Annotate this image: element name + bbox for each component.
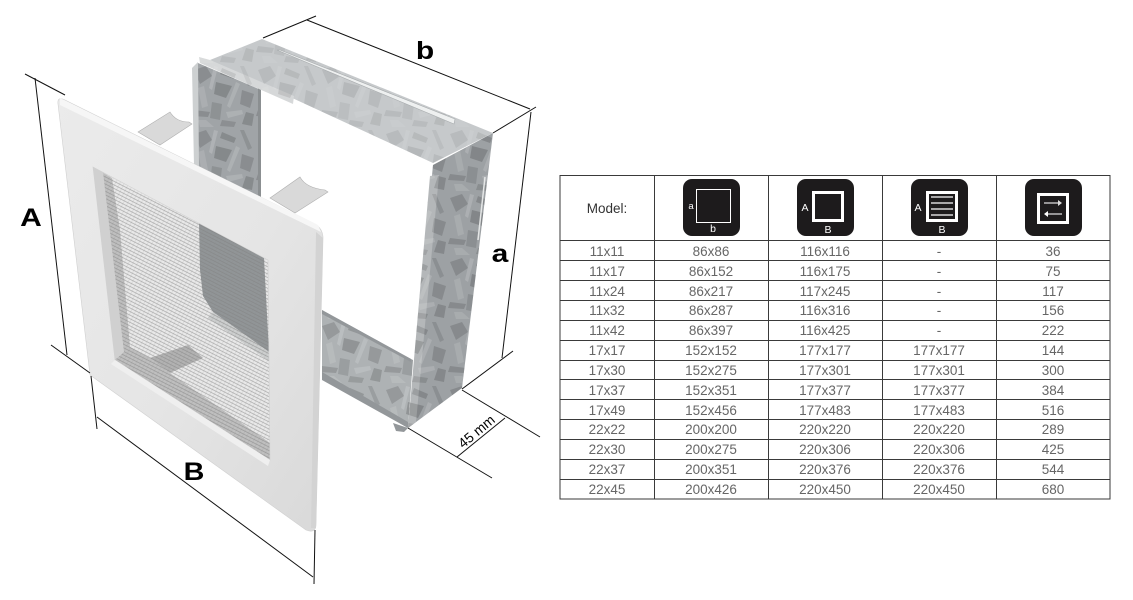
- row 11x11: 86x86: [693, 244, 729, 259]
- back frame bottom plate: [322, 310, 413, 432]
- dimension A: A: [20, 203, 42, 231]
- row 22x22: 220x220: [799, 422, 851, 437]
- row 11x11: [590, 244, 1061, 259]
- icon: opening size a x b: b: [710, 223, 716, 235]
- row 22x30: 425: [1042, 442, 1064, 457]
- row 11x32: 116x316: [800, 303, 850, 318]
- row 11x42: 86x397: [689, 323, 733, 338]
- row 17x30: 152x275: [685, 363, 737, 378]
- row 22x45: 22x45: [589, 482, 625, 497]
- row 22x22: 200x200: [685, 422, 737, 437]
- dimension B: B: [184, 458, 204, 486]
- row 17x37: 384: [1042, 383, 1065, 398]
- row 22x45: 220x450: [799, 482, 851, 497]
- row 11x11: 36: [1045, 244, 1061, 259]
- icon: outer size A x B: [797, 179, 854, 236]
- row 22x30: 200x275: [685, 442, 737, 457]
- row 11x24: 117x245: [800, 284, 850, 299]
- row 17x49: 152x456: [685, 403, 737, 418]
- row 17x37: 177x377: [913, 383, 965, 398]
- illustration: back mounting frame: [192, 39, 493, 432]
- row 11x17: 11x17: [589, 264, 625, 279]
- row 17x37: 177x377: [799, 383, 851, 398]
- dimension A: [20, 74, 90, 373]
- row 11x42: 222: [1042, 323, 1064, 338]
- row 17x17: 177x177: [913, 343, 965, 358]
- icon: outer size A x B: B: [824, 224, 832, 236]
- row 17x17: 17x17: [589, 343, 625, 358]
- row 11x17: 116x175: [800, 264, 850, 279]
- size table: [560, 175, 1110, 499]
- row 11x32: -: [937, 303, 941, 318]
- row 11x17: 75: [1045, 264, 1061, 279]
- row 22x30: [589, 442, 1064, 457]
- row 22x22: 289: [1042, 422, 1064, 437]
- row 17x30: [589, 363, 1064, 378]
- dimension B: [91, 376, 315, 584]
- illustration: white front grille: [58, 98, 323, 531]
- inner shadow bands: [93, 167, 270, 460]
- row 11x24: 11x24: [589, 284, 625, 299]
- row 11x17: -: [937, 264, 941, 279]
- row 11x42: -: [937, 323, 941, 338]
- row 17x17: 177x177: [799, 343, 851, 358]
- row 17x30: 17x30: [589, 363, 625, 378]
- row 17x30: 177x301: [799, 363, 851, 378]
- dimension 45 mm: [408, 390, 540, 478]
- row 17x17: 144: [1042, 343, 1065, 358]
- icon: opening size a x b: [683, 179, 740, 236]
- row 22x37: 220x376: [913, 462, 965, 477]
- grille opening with mesh: [93, 167, 270, 460]
- row 11x11: 11x11: [590, 244, 624, 259]
- back frame right wall: [408, 133, 493, 428]
- row 22x37: 544: [1042, 462, 1065, 477]
- row 11x17: 86x152: [689, 264, 733, 279]
- row 22x22: 22x22: [589, 422, 625, 437]
- row 22x45: 220x450: [913, 482, 965, 497]
- illustration: mounting clips: [138, 112, 328, 213]
- icon: grille size A x B: [911, 179, 968, 236]
- row 11x11: -: [937, 244, 941, 259]
- row 22x30: 220x306: [799, 442, 851, 457]
- table grid: [560, 175, 1110, 499]
- row 17x49: 177x483: [913, 403, 965, 418]
- back frame seen through mesh: [199, 222, 269, 352]
- right clip: [270, 177, 328, 213]
- dimension a: a: [492, 239, 509, 267]
- icon: grille size A x B: B: [938, 224, 946, 236]
- row 11x24: 86x217: [689, 284, 733, 299]
- dimension 45 mm: 45 mm: [455, 411, 498, 451]
- row 11x42: [589, 323, 1064, 338]
- back frame left wall: [192, 62, 261, 200]
- dimension b: b: [416, 36, 434, 64]
- row 11x32: 11x32: [589, 303, 625, 318]
- row 22x45: 680: [1042, 482, 1064, 497]
- icon: grille size A x B: A: [914, 202, 922, 214]
- row 11x17: [589, 264, 1061, 279]
- header: model: Model:: [587, 201, 627, 216]
- row 22x37: [589, 462, 1065, 477]
- row 22x37: 200x351: [685, 462, 737, 477]
- dimension b: [263, 16, 536, 133]
- row 17x30: 300: [1042, 363, 1064, 378]
- icon: airflow area: [1025, 179, 1082, 236]
- row 11x42: 11x42: [589, 323, 625, 338]
- grille right edge: [311, 232, 323, 528]
- row 17x49: 177x483: [799, 403, 851, 418]
- row 17x30: 177x301: [913, 363, 965, 378]
- back frame top face: [199, 39, 493, 163]
- dimension a: [462, 112, 531, 389]
- row 11x32: 156: [1042, 303, 1064, 318]
- row 17x17: 152x152: [685, 343, 737, 358]
- row 17x49: [589, 403, 1064, 418]
- row 22x37: 220x376: [799, 462, 851, 477]
- grille lower inner bevel: [111, 360, 270, 466]
- row 22x30: 220x306: [913, 442, 965, 457]
- row 17x49: 516: [1042, 403, 1064, 418]
- row 17x37: 17x37: [589, 383, 625, 398]
- row 17x37: [589, 383, 1065, 398]
- row 11x32: [589, 303, 1064, 318]
- left clip: [138, 112, 192, 145]
- row 22x22: 220x220: [913, 422, 965, 437]
- row 17x49: 17x49: [589, 403, 625, 418]
- row 22x30: 22x30: [589, 442, 625, 457]
- grille face: [58, 99, 323, 531]
- grille top bevel highlight: [60, 98, 321, 232]
- icon: outer size A x B: A: [801, 202, 809, 214]
- icon: opening size a x b: a: [688, 201, 694, 212]
- row 22x45: [589, 482, 1064, 497]
- row 11x32: 86x287: [689, 303, 733, 318]
- row 11x24: [589, 284, 1064, 299]
- clip shadow through mesh: [150, 345, 203, 373]
- row 11x24: -: [937, 284, 941, 299]
- row 22x22: [589, 422, 1064, 437]
- row 11x11: 116x116: [800, 244, 850, 259]
- row 22x45: 200x426: [685, 482, 737, 497]
- row 17x37: 152x351: [685, 383, 737, 398]
- row 17x17: [589, 343, 1065, 358]
- row 22x37: 22x37: [589, 462, 625, 477]
- row 11x24: 117: [1042, 284, 1064, 299]
- row 11x42: 116x425: [800, 323, 850, 338]
